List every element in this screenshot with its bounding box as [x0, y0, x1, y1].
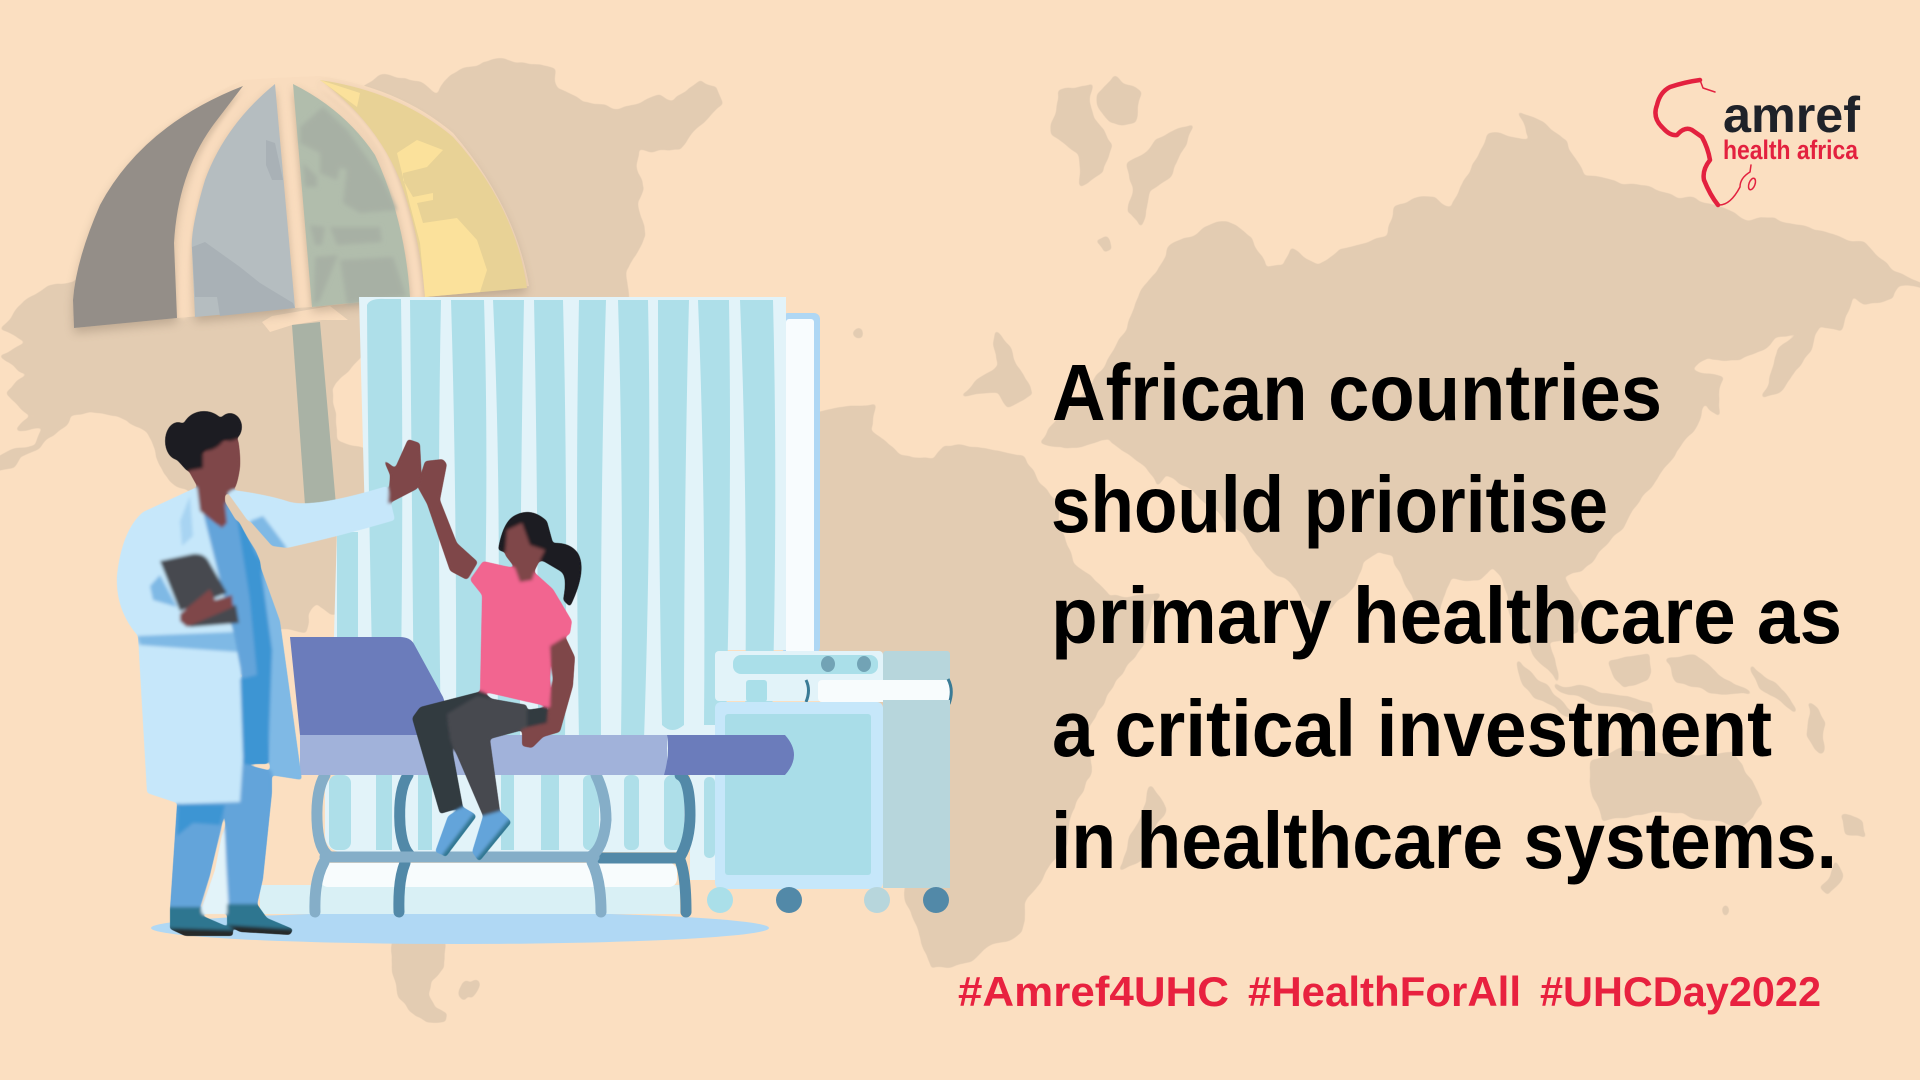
umbrella: [73, 76, 529, 505]
doctor raised sleeve: [225, 486, 395, 548]
tablet: [160, 554, 239, 627]
bed frame back: [399, 775, 690, 912]
main message: primary healthcare as: [1051, 571, 1842, 660]
doctor trousers: [170, 764, 272, 914]
girl hair: [498, 512, 582, 607]
girl raised arm: [417, 459, 478, 580]
main message: African countries: [1052, 348, 1662, 437]
logo: amref health africa: health africa: [1723, 135, 1859, 165]
floor shadow: [151, 912, 769, 944]
cart wheels: [707, 887, 949, 913]
umbrella panel: yellow: [320, 80, 527, 297]
doctor coat back panel: [247, 529, 302, 780]
doctor hand holding tablet: [180, 589, 233, 627]
medical cart: [707, 651, 951, 913]
main message: [1051, 348, 1842, 885]
logo: amref health africa: [1655, 80, 1860, 205]
hashtags: #Amref4UHC: [958, 968, 1229, 1015]
hospital curtain: [325, 297, 786, 880]
logo icon: Africa outline: [1655, 80, 1757, 205]
doctor coat: [117, 487, 243, 804]
doctor scrubs: [200, 502, 272, 764]
hospital bed: [260, 637, 794, 914]
main message: a critical investment: [1052, 684, 1772, 773]
doctor raised hand: [383, 439, 422, 504]
main message: should prioritise: [1051, 460, 1608, 549]
logo: amref health africa: amref: [1723, 87, 1860, 143]
hashtags: #HealthForAll: [1248, 968, 1521, 1015]
doctor head and neck: [187, 439, 240, 528]
bed frame front: [315, 775, 606, 912]
umbrella panel: green: [293, 84, 410, 307]
girl shirt: [470, 561, 572, 707]
hospital curtain post: [782, 313, 820, 655]
umbrella panel: blue-grey: [192, 84, 295, 317]
umbrella panel: grey: [73, 86, 243, 328]
girl shoes: [435, 807, 510, 860]
doctor shoes: [168, 904, 293, 936]
hashtags: #UHCDay2022: [1540, 968, 1821, 1015]
girl far arm: [522, 636, 575, 748]
umbrella pole: [292, 322, 336, 505]
main message: in healthcare systems.: [1051, 796, 1837, 885]
girl face: [505, 523, 545, 582]
hand on bed: [522, 723, 547, 748]
bed backrest: [290, 637, 456, 735]
mattress: [300, 735, 794, 775]
hashtags: [958, 968, 1821, 1015]
doctor hair: [165, 411, 242, 471]
doctor: [117, 411, 422, 936]
girl patient: [412, 459, 582, 860]
girl trousers: [412, 691, 547, 816]
